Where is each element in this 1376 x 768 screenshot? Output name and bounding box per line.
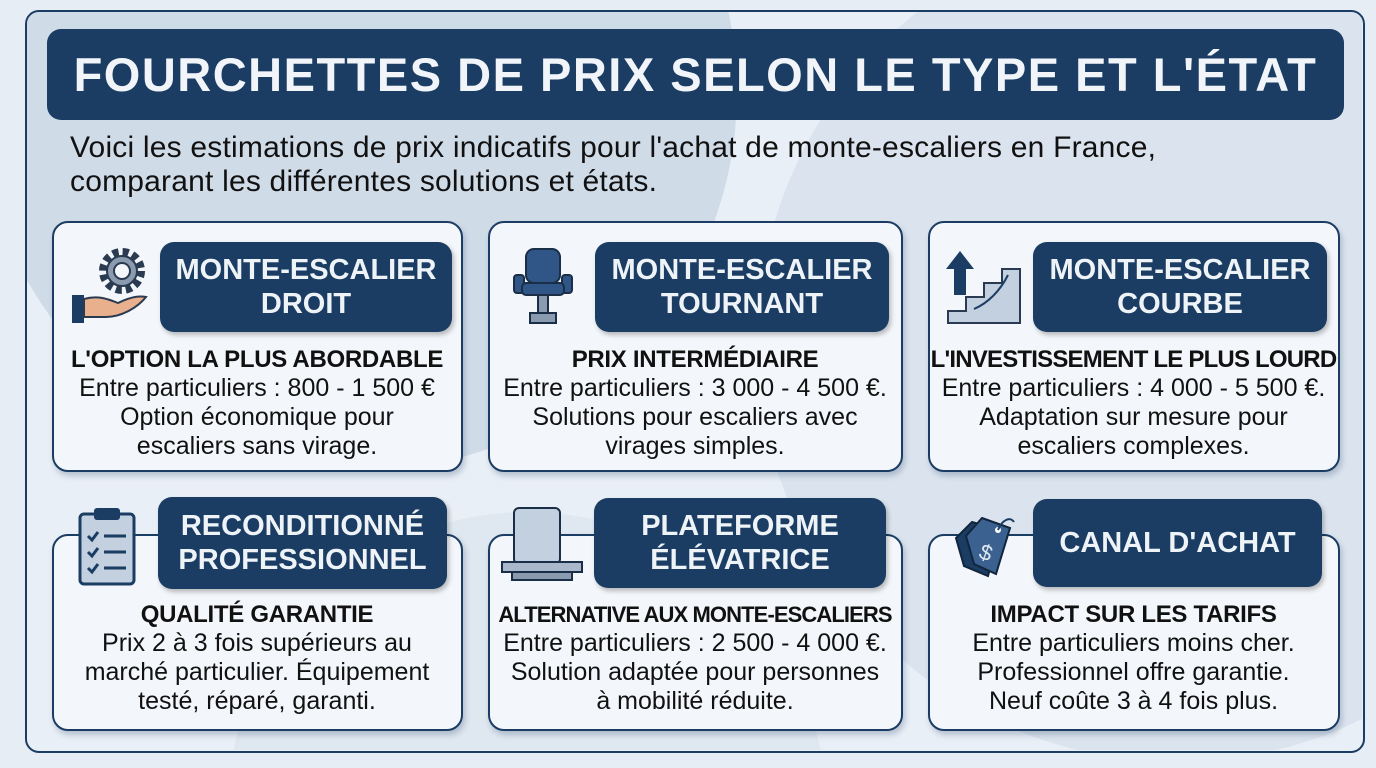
panel: plateforme élévatrice [488,534,903,731]
text: à mobilité réduite. [596,687,794,715]
header: TOURNANT [661,288,823,320]
text: Entre particuliers : 2 500 - 4 000 €. [503,629,887,657]
icon: clipboard [78,508,136,586]
text: Solutions pour escaliers avec [532,403,858,431]
text: L'OPTION LA PLUS ABORDABLE [71,346,443,373]
header [160,242,452,332]
subtitle: comparant les différentes solutions et états. [70,165,657,198]
header: RECONDITIONNÉ [181,510,424,542]
text [71,346,443,460]
header: MONTE-ESCALIER [612,254,872,286]
text: Entre particuliers moins cher. [972,629,1295,657]
panel: monte-escalier courbe [928,221,1340,472]
header [595,242,889,332]
subtitle [70,131,1156,198]
panel: canal d'achat [928,534,1340,731]
text: Entre particuliers : 800 - 1 500 € [79,374,435,402]
title bar: FOURCHETTES DE PRIX SELON LE TYPE ET L'ÉTAT [74,48,1317,101]
text: virages simples. [605,432,785,460]
icon: price tags [954,516,1015,578]
text: Neuf coûte 3 à 4 fois plus. [989,687,1278,715]
panel: reconditionné professionnel [52,534,463,731]
panel: monte-escalier tournant [488,221,903,472]
header [1033,499,1322,587]
text: PRIX INTERMÉDIAIRE [572,346,818,373]
text: L'INVESTISSEMENT LE PLUS LOURD [931,346,1336,373]
text [972,601,1295,715]
header: COURBE [1117,288,1243,320]
text [85,600,430,715]
text: escaliers sans virage. [137,432,377,460]
header: PLATEFORME [641,510,839,542]
text: Solution adaptée pour personnes [511,658,879,686]
text [931,346,1336,460]
header: MONTE-ESCALIER [176,254,436,286]
text: Option économique pour [120,403,394,431]
icon: stairs arrow [946,251,1021,324]
icon: stairlift chair [513,248,573,324]
text: marché particulier. Équipement [85,658,429,686]
subtitle: Voici les estimations de prix indicatifs pour l'achat de monte-escaliers en France, [70,131,1156,164]
header [158,497,447,589]
text: escaliers complexes. [1017,432,1250,460]
text: Entre particuliers : 4 000 - 5 500 €. [942,374,1325,402]
header: DROIT [261,288,351,320]
text: Prix 2 à 3 fois supérieurs au [102,629,412,657]
icon: price tags: $ [976,539,996,566]
text: IMPACT SUR LES TARIFS [990,601,1277,628]
text: Professionnel offre garantie. [977,658,1290,686]
title bar [47,29,1344,120]
text: Adaptation sur mesure pour [979,403,1288,431]
header: PROFESSIONNEL [178,544,427,576]
header [594,498,886,588]
text: testé, réparé, garanti. [138,687,376,715]
panel: monte-escalier droit [52,221,463,472]
text [503,346,887,460]
header: ÉLÉVATRICE [650,544,830,576]
icon: hand gear [72,248,148,323]
text: Entre particuliers : 3 000 - 4 500 €. [503,374,887,402]
text [498,602,892,715]
header: MONTE-ESCALIER [1050,254,1310,286]
header: CANAL D'ACHAT [1059,527,1296,559]
icon: platform [501,507,583,581]
header [1033,242,1327,332]
text: QUALITÉ GARANTIE [141,601,373,628]
text: ALTERNATIVE AUX MONTE-ESCALIERS [498,602,892,627]
